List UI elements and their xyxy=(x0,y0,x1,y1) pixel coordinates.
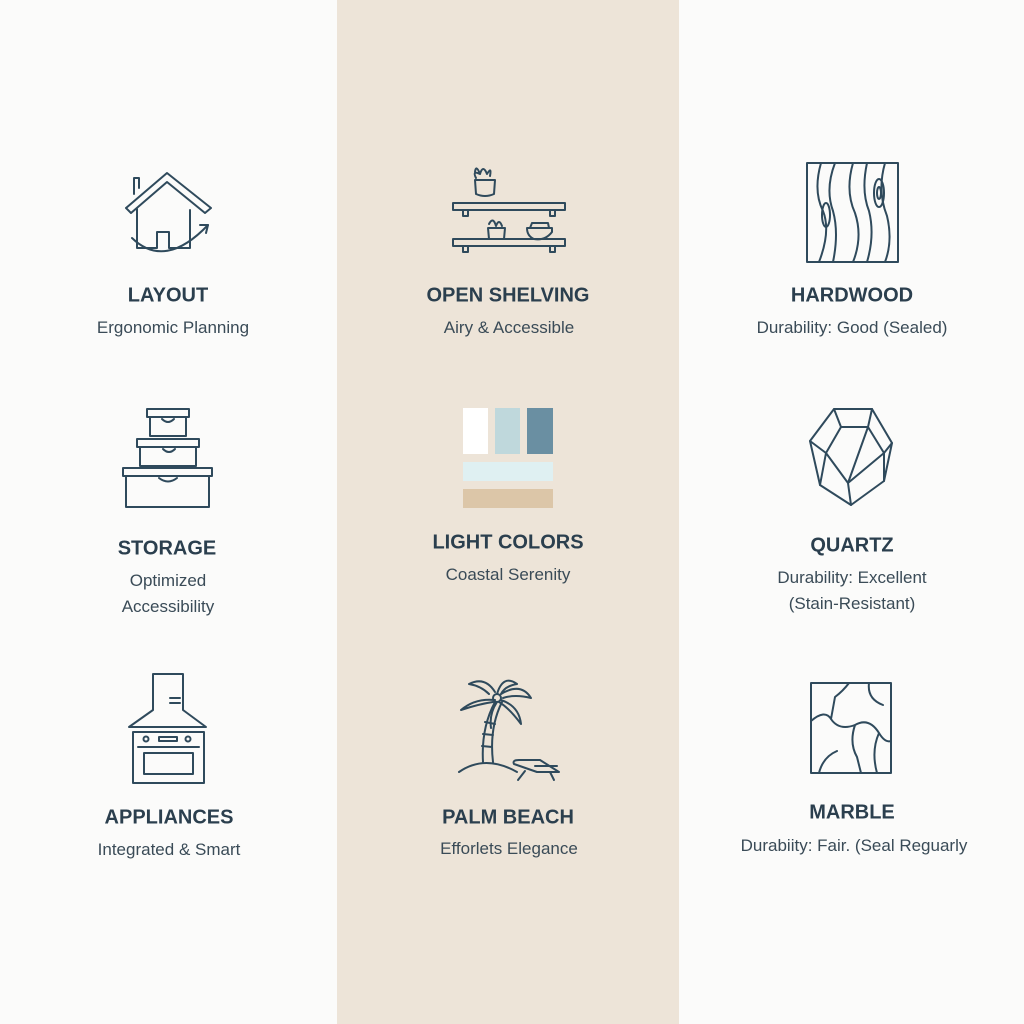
panel: middle column background xyxy=(337,0,679,1024)
heading: palm beach: PALM BEACH xyxy=(442,806,574,828)
heading: hardwood: HARDWOOD xyxy=(791,284,913,306)
text: appliances sub: Integrated & Smart xyxy=(98,840,240,859)
heading: appliances: APPLIANCES xyxy=(105,806,233,828)
icon: color swatches xyxy=(463,408,553,508)
text: storage sub: Optimized xyxy=(130,571,206,590)
heading: marble: MARBLE xyxy=(809,802,895,824)
heading: quartz: QUARTZ xyxy=(810,534,894,556)
icon: marble xyxy=(810,682,892,774)
text: light colors sub: Coastal Serenity xyxy=(446,565,570,584)
icon: appliances xyxy=(128,673,207,784)
icon: palm beach xyxy=(458,680,560,781)
text: layout sub: Ergonomic Planning xyxy=(97,318,249,337)
text: quartz sub: Durability: Excellent xyxy=(777,568,927,587)
heading: layout: LAYOUT xyxy=(128,284,208,306)
text: hardwood sub: Durability: Good (Sealed) xyxy=(757,318,947,337)
icon: open shelving xyxy=(452,167,566,253)
icon: quartz xyxy=(809,408,893,506)
text: marble sub: Durabiity: Fair. (Seal Reguarly xyxy=(741,836,967,855)
text: quartz sub: (Stain-Resistant) xyxy=(789,594,915,613)
text: quartz sub xyxy=(777,568,927,613)
heading: open shelving: OPEN SHELVING xyxy=(426,284,590,306)
text: storage sub: Accessibility xyxy=(122,597,214,616)
heading: light colors: LIGHT COLORS xyxy=(432,532,584,554)
heading: storage: STORAGE xyxy=(118,538,216,560)
icon: house xyxy=(125,172,212,252)
text: storage sub xyxy=(122,571,214,616)
text: open shelving sub: Airy & Accessible xyxy=(444,318,574,337)
text: palm beach sub: Efforlets Elegance xyxy=(440,839,578,858)
icon: storage boxes xyxy=(122,408,213,508)
icon: hardwood xyxy=(806,162,899,263)
